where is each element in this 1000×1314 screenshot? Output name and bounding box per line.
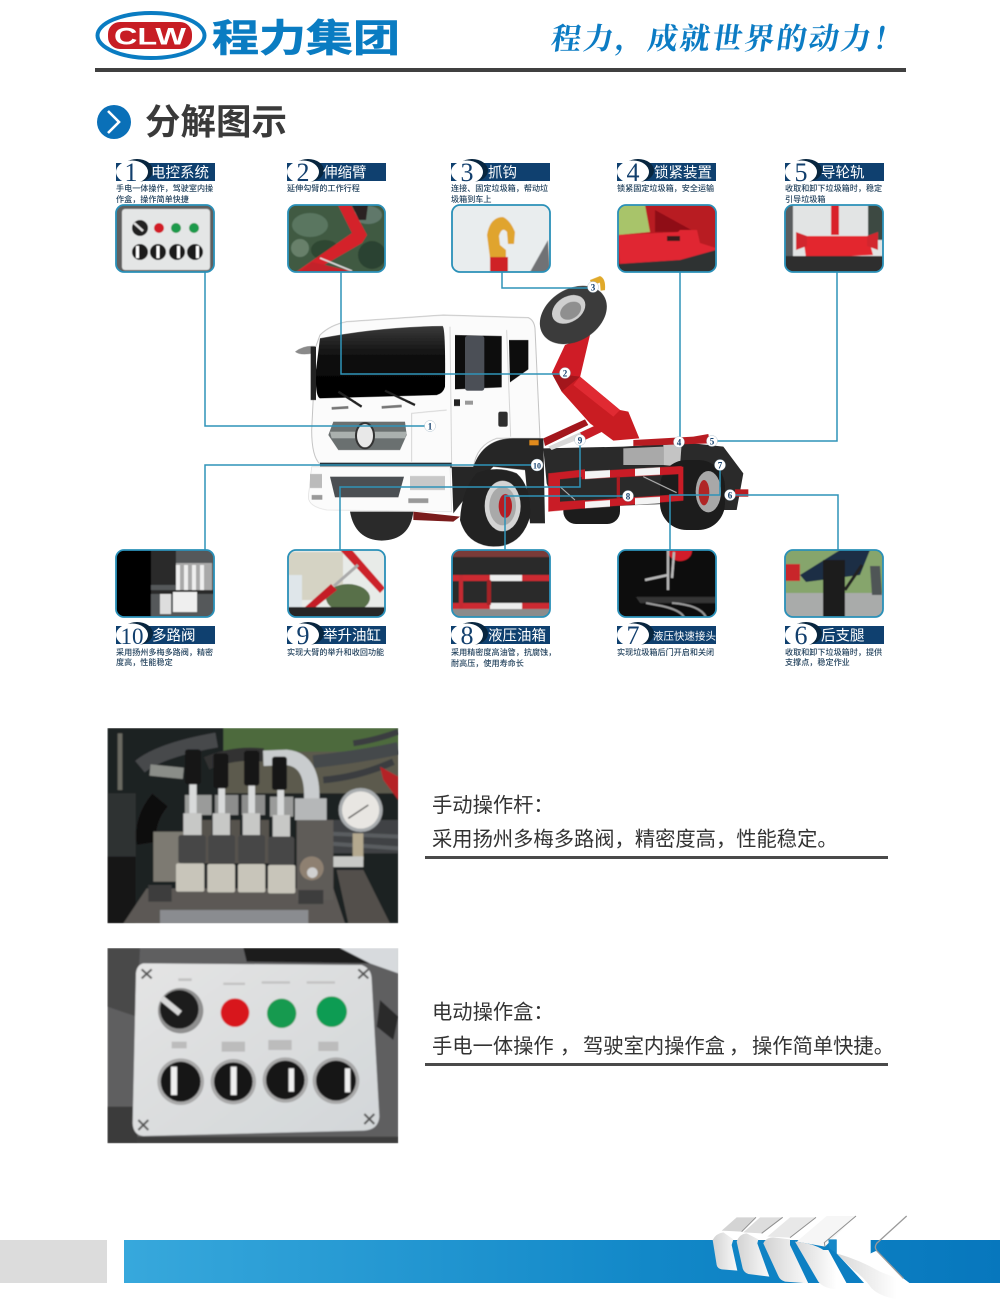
photo: lock — [618, 205, 716, 272]
footer chevron ornament — [713, 1216, 912, 1300]
description 9: 实现大臂的举升和收回功能 — [287, 647, 384, 657]
hook arm — [529, 274, 710, 446]
description 8: 采用精密度高油管，抗腐蚀， — [451, 647, 556, 657]
photo: control box — [116, 205, 214, 272]
label bar 4: 锁紧装置 — [654, 164, 712, 182]
label bar 10 — [116, 622, 215, 649]
logo wordmark: 程力集团 — [212, 18, 400, 60]
label bar 3 — [451, 158, 550, 187]
text block: electric box: 手电一体操作 — [432, 1035, 554, 1058]
label bar 6: 6 — [794, 621, 808, 650]
truck illustration — [295, 274, 748, 547]
label bar 8 — [451, 621, 550, 650]
label bar 7 — [617, 621, 716, 650]
panel: 3 hook — [451, 158, 550, 272]
text block: electric box — [432, 1001, 894, 1058]
description 10 — [116, 647, 213, 667]
numbered markers on truck: 5 — [710, 436, 715, 446]
footer band — [0, 1216, 1000, 1300]
label bar 9: 举升油缸 — [323, 626, 381, 644]
label bar 5: 5 — [794, 158, 808, 187]
label bar 3: 3 — [460, 158, 474, 187]
panel: 2 telescopic arm — [287, 158, 386, 272]
description 3 — [451, 183, 548, 204]
numbered markers on truck — [424, 282, 736, 502]
label bar 8: 液压油箱 — [488, 628, 546, 644]
photo: hook — [452, 205, 550, 272]
numbered markers on truck: 1 — [428, 422, 433, 432]
numbered markers on truck: 6 — [728, 490, 733, 500]
numbered markers on truck: 9 — [578, 436, 583, 446]
label bar 1 — [116, 158, 215, 187]
label bar 10: 多路阀 — [152, 628, 196, 644]
description 10: 采用扬州多梅多路阀，精密 — [116, 647, 213, 657]
front wheel — [460, 469, 530, 547]
chassis — [543, 443, 743, 510]
label bar 1: 电控系统 — [151, 164, 209, 182]
text block: manual lever — [432, 794, 838, 851]
photo: valve — [116, 550, 214, 617]
label bar 2: 2 — [296, 158, 310, 187]
panel: 9 lift cylinder — [287, 550, 386, 657]
label bar 10: 10 — [120, 624, 144, 649]
photo: guide rail — [785, 205, 883, 272]
logo emblem: CLW — [114, 24, 186, 50]
cab body — [295, 315, 540, 467]
panel: 4 locking device — [617, 158, 716, 272]
text block: electric box: ， — [729, 1036, 749, 1058]
hook — [590, 276, 605, 291]
label bar 5: 导轮轨 — [821, 164, 864, 182]
description 3: 连接、固定垃圾箱，帮动垃 — [451, 183, 548, 193]
panel: 10 multi-way valve — [116, 550, 215, 667]
description 2: 延伸勾臂的工作行程 — [287, 183, 360, 193]
photo: tank — [452, 550, 550, 617]
label bar 5 — [785, 158, 884, 187]
red lift cylinders — [543, 419, 588, 446]
wheel arch — [452, 438, 545, 523]
photo: manual valve levers — [107, 728, 398, 923]
heading text: 分解图示 — [145, 102, 287, 142]
label bar 1: 1 — [124, 158, 138, 187]
description 1 — [116, 183, 213, 204]
description 3: 圾箱到车上 — [451, 194, 491, 204]
description 1: 手电一体操作，驾驶室内操 — [116, 183, 213, 193]
text block: electric box: 操作简单快捷。 — [752, 1035, 894, 1058]
panel: 7 quick connector — [617, 541, 716, 657]
far front wheel — [350, 512, 413, 541]
panel: 8 hydraulic tank — [451, 550, 556, 668]
bumper — [308, 463, 452, 512]
photo: cylinder — [288, 550, 385, 617]
numbered markers on truck: 10 — [533, 462, 541, 470]
description 5 — [785, 183, 882, 204]
description 4: 锁紧固定垃圾箱，安全运输 — [617, 183, 714, 193]
section heading — [97, 102, 287, 142]
numbered markers on truck: 7 — [718, 460, 723, 470]
text block: electric box: ， — [560, 1036, 580, 1058]
logo emblem — [98, 13, 204, 58]
panel: 1 electric control — [116, 158, 215, 272]
numbered markers on truck: 4 — [677, 438, 682, 448]
leader lines — [205, 272, 838, 550]
lever group — [176, 749, 295, 893]
red side guard — [548, 466, 683, 512]
header logo — [98, 13, 400, 60]
numbered markers on truck: 3 — [591, 282, 596, 292]
rear wheel — [660, 460, 725, 530]
label bar 9 — [287, 621, 386, 650]
text block: electric box: 电动操作盒： — [432, 1001, 554, 1024]
label bar 4: 4 — [626, 158, 640, 187]
label bar 7: 液压快速接头 — [653, 630, 716, 642]
description 6: 支撑点，稳定作业 — [785, 657, 850, 667]
label bar 6 — [785, 621, 884, 650]
pressure gauge — [333, 788, 383, 862]
text block: manual lever: 手动操作杆： — [432, 794, 554, 817]
label bar 8: 8 — [460, 621, 474, 650]
label bar 7: 7 — [626, 621, 640, 650]
description 6 — [785, 647, 882, 667]
panel: 6 rear leg — [785, 550, 884, 667]
text block: electric box: 驾驶室内操作盒 — [583, 1035, 725, 1058]
slogan: 程力，成就世界的动力！ — [549, 22, 906, 57]
label bar 9: 9 — [296, 621, 310, 650]
panel: 5 guide rail — [785, 158, 884, 272]
photo: arm — [288, 205, 386, 272]
description 1: 作盒，操作简单快捷 — [116, 194, 189, 204]
description 8 — [451, 647, 556, 668]
description 7: 实现垃圾箱后门开启和关闭 — [617, 647, 714, 657]
description 10: 度高，性能稳定 — [116, 657, 173, 667]
header rule — [95, 68, 906, 72]
rear bar — [735, 489, 748, 497]
description 6: 收取和卸下垃圾箱时，提供 — [785, 647, 882, 657]
description 5: 引导垃圾箱 — [785, 194, 825, 204]
description 5: 收取和卸下垃圾箱时，稳定 — [785, 183, 882, 193]
front grille — [328, 422, 407, 450]
text block: manual lever: 采用扬州多梅多路阀，精密度高，性能稳定。 — [432, 828, 838, 851]
description 8: 耐高压，使用寿命长 — [451, 658, 524, 668]
photo: electric control box — [107, 948, 398, 1143]
label bar 2: 伸缩臂 — [323, 164, 366, 182]
middle wheels — [563, 487, 620, 524]
photo: rear leg — [785, 550, 883, 617]
numbered markers on truck: 8 — [626, 492, 631, 502]
label bar 3: 抓钩 — [488, 164, 517, 182]
label bar 4 — [617, 158, 716, 187]
photo: connector — [618, 550, 716, 616]
cargo tyre — [529, 274, 618, 356]
label bar 6: 后支腿 — [821, 628, 865, 644]
label bar 2 — [287, 158, 386, 187]
icon: chevron bullet — [97, 105, 131, 139]
numbered markers on truck: 2 — [563, 368, 568, 378]
